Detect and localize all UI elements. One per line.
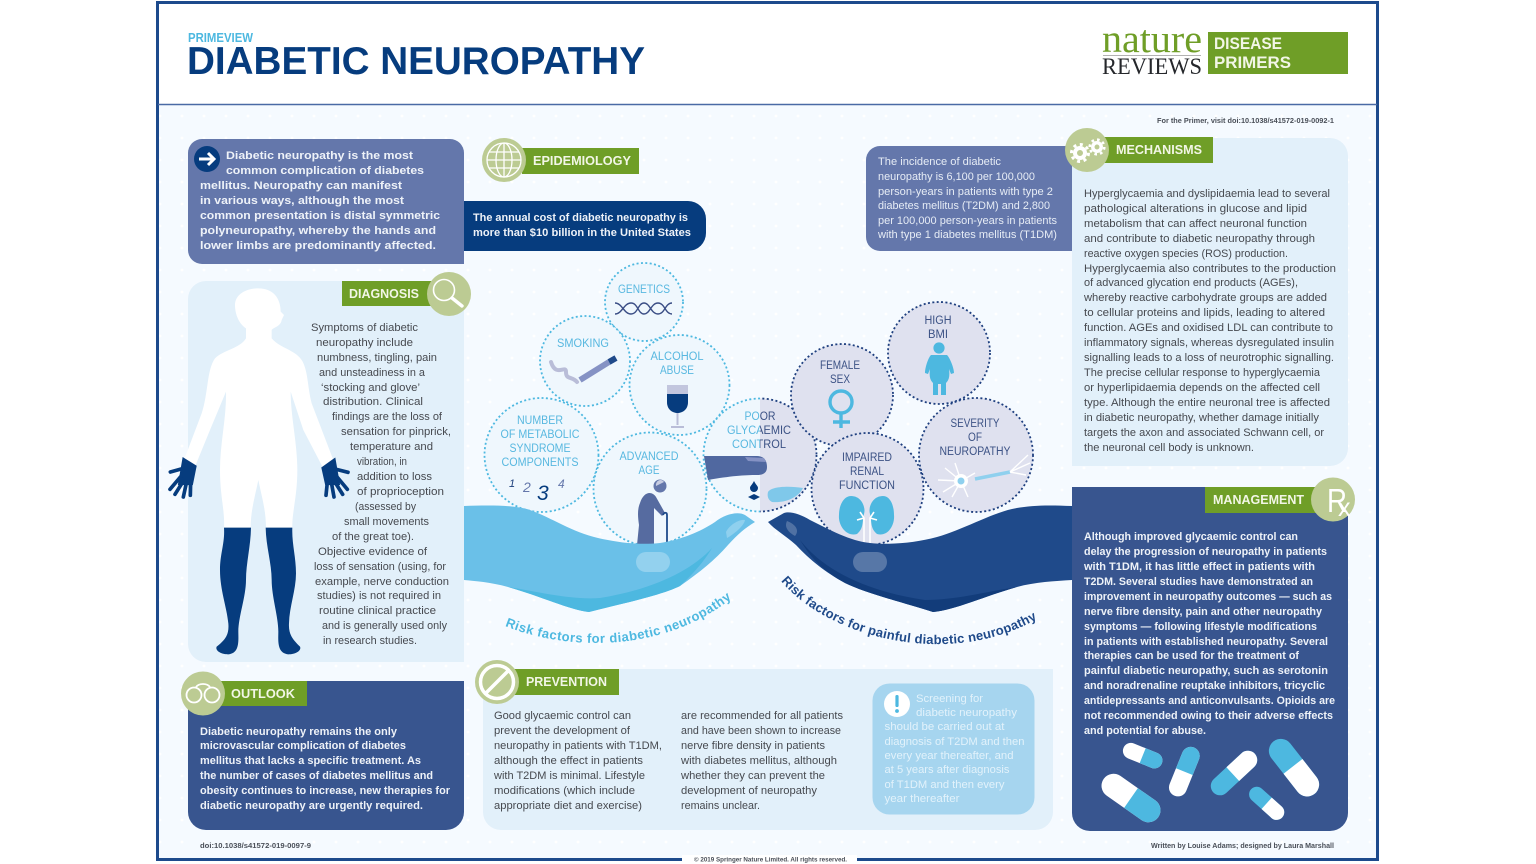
logo: nature reviews disease primers: PRIMERS bbox=[1214, 54, 1291, 72]
panel: annual cost bbox=[464, 201, 706, 251]
circle: advanced age: ADVANCED bbox=[620, 449, 679, 463]
circle: metabolic syndrome: COMPONENTS bbox=[502, 455, 578, 469]
circle: metabolic syndrome: NUMBER bbox=[517, 413, 563, 427]
panel: incidence: person-years in patients with type 2 bbox=[878, 186, 1053, 198]
heading: prevention: PREVENTION bbox=[526, 674, 607, 689]
prevention text column 1: Good glycaemic control can bbox=[494, 710, 631, 722]
logo: nature reviews disease primers: DISEASE bbox=[1214, 35, 1282, 53]
mechanisms text: type. Although the entire neuronal tree is affected bbox=[1084, 397, 1330, 409]
heading: management: x bbox=[1338, 494, 1351, 522]
management text: therapies can be used for the treatment of bbox=[1084, 650, 1299, 662]
mechanisms text: signalling leads to a loss of neurotrophic signalling. bbox=[1084, 352, 1334, 364]
callout: screening bbox=[872, 684, 1034, 814]
eyebrow: primeview: PRIMEVIEW bbox=[188, 31, 253, 45]
heading: diagnosis bbox=[342, 272, 471, 316]
circle: advanced age bbox=[594, 432, 706, 546]
heading: management: MANAGEMENT bbox=[1213, 492, 1304, 507]
caption: risk factors for painful diabetic neuropathy: Risk factors for painful diabetic neuropathy bbox=[782, 576, 1035, 644]
circle: poor glycaemic control: GLYCAEMIC bbox=[727, 423, 791, 437]
circle: metabolic syndrome: 3 bbox=[537, 482, 549, 505]
intro text: mellitus. Neuropathy can manifest bbox=[200, 180, 402, 192]
callout: screening: of T1DM and then every bbox=[884, 779, 1005, 791]
circle: female sex bbox=[791, 344, 893, 446]
title block bbox=[187, 31, 645, 83]
circle: severity of neuropathy: NEUROPATHY bbox=[940, 444, 1010, 458]
panel: incidence: neuropathy is 6,100 per 100,000 bbox=[878, 171, 1035, 183]
diagnosis text: of proprioception bbox=[357, 486, 444, 498]
outlook text: obesity continues to increase, new therapies for bbox=[200, 785, 451, 797]
circle: impaired renal function: IMPAIRED bbox=[842, 450, 892, 464]
callout: screening: Screening for bbox=[916, 693, 983, 705]
circle: smoking bbox=[540, 316, 630, 406]
circle: female sex: FEMALE bbox=[820, 358, 860, 372]
panel: incidence: per 100,000 person-years in patients bbox=[878, 215, 1057, 227]
mechanisms text: function. AGEs and oxidised LDL can contribute to bbox=[1084, 322, 1333, 334]
circle: genetics: GENETICS bbox=[618, 282, 670, 296]
diagnosis text: studies) is not required in bbox=[317, 590, 441, 602]
callout: screening: at 5 years after diagnosis bbox=[884, 764, 1010, 776]
prevention text column 1: although the effect in patients bbox=[494, 755, 643, 767]
mechanisms text: metabolism that can affect neuronal function bbox=[1084, 218, 1307, 230]
outlook text: microvascular complication of diabetes bbox=[200, 740, 406, 752]
diagnosis text: numbness, tingling, pain bbox=[317, 352, 437, 364]
panel: prevention bbox=[475, 660, 1053, 830]
diagnosis text: addition to loss bbox=[357, 471, 432, 483]
footer: doi: doi:10.1038/s41572-019-0097-9 bbox=[200, 841, 311, 850]
mechanisms text: whereby reactive carbohydrate groups are added bbox=[1083, 292, 1327, 304]
diagnosis text: in research studies. bbox=[323, 635, 417, 647]
callout: screening: year thereafter bbox=[884, 793, 960, 805]
heading: outlook bbox=[181, 672, 307, 716]
panel: annual cost: more than $10 billion in the United States bbox=[473, 227, 691, 239]
circle: poor glycaemic control bbox=[704, 398, 816, 512]
icon: arrow bbox=[194, 146, 220, 172]
intro text bbox=[200, 150, 440, 252]
mechanisms text: pathological alterations in glucose and lipid bbox=[1084, 203, 1307, 215]
footer: copyright: © 2019 Springer Nature Limited. All rights reserved. bbox=[694, 856, 847, 864]
risk factor circles: diabetic neuropathy bbox=[484, 263, 730, 546]
circle: metabolic syndrome: SYNDROME bbox=[510, 441, 570, 455]
outlook text: mellitus that lacks a specific treatment. As bbox=[200, 755, 421, 767]
heading: diagnosis: DIAGNOSIS bbox=[349, 286, 419, 301]
management text bbox=[1083, 531, 1335, 737]
panel: introduction bbox=[188, 139, 464, 264]
mechanisms text: Hyperglycaemia and dyslipidaemia lead to several bbox=[1084, 188, 1330, 200]
management text: Although improved glycaemic control can bbox=[1084, 531, 1298, 543]
page body background bbox=[158, 104, 1378, 859]
logo: nature reviews disease primers bbox=[1102, 18, 1348, 79]
logo: nature reviews disease primers: nature bbox=[1102, 18, 1202, 61]
prevention text column 1: appropriate diet and exercise) bbox=[494, 800, 642, 812]
management text: delay the progression of neuropathy in patients bbox=[1084, 546, 1327, 558]
outlook text: Diabetic neuropathy remains the only bbox=[200, 726, 398, 738]
panel: mechanisms bbox=[1065, 128, 1348, 466]
intro text: in various ways, although the most bbox=[200, 195, 404, 207]
circle: female sex: SEX bbox=[830, 372, 850, 386]
circle: high BMI: HIGH bbox=[924, 313, 952, 327]
prevention text column 2: and have been shown to increase bbox=[681, 725, 841, 737]
circle: poor glycaemic control: POOR bbox=[744, 409, 776, 423]
mechanisms text: targets the axon and associated Schwann cell, or bbox=[1084, 427, 1324, 439]
circle: severity of neuropathy: SEVERITY bbox=[950, 416, 1000, 430]
circle: poor glycaemic control: CONTROL bbox=[732, 437, 786, 451]
outlook text: diabetic neuropathy are urgently required. bbox=[200, 800, 423, 812]
heading: epidemiology: EPIDEMIOLOGY bbox=[533, 153, 631, 168]
heading: mechanisms bbox=[1065, 128, 1213, 172]
management text: painful diabetic neuropathy, such as serotonin bbox=[1084, 665, 1328, 677]
callout: screening: should be carried out at bbox=[884, 721, 1005, 733]
diagnosis text: and unsteadiness in a bbox=[319, 367, 426, 379]
management text: not recommended owing to their adverse effects bbox=[1084, 710, 1333, 722]
prevention text column 1 bbox=[493, 710, 662, 812]
circle: metabolic syndrome: 2 bbox=[522, 479, 531, 495]
diagnosis text: loss of sensation (using, for bbox=[314, 561, 446, 573]
circle: impaired renal function: RENAL bbox=[850, 464, 884, 478]
circle: metabolic syndrome: OF METABOLIC bbox=[500, 427, 580, 441]
prevention text column 2: with diabetes mellitus, although bbox=[680, 755, 837, 767]
risk factor circles: painful diabetic neuropathy bbox=[791, 302, 1033, 545]
white silhouette bbox=[184, 288, 333, 528]
diagnosis text: neuropathy include bbox=[316, 337, 413, 349]
management text: antidepressants and anticonvulsants. Opioids are bbox=[1084, 695, 1335, 707]
diagnosis text: of the great toe). bbox=[332, 531, 414, 543]
panel: incidence: The incidence of diabetic bbox=[878, 156, 1001, 168]
mechanisms text: inflammatory signals, whereas dysregulated insulin bbox=[1084, 337, 1334, 349]
intro text: Diabetic neuropathy is the most bbox=[226, 150, 413, 162]
mechanisms text: or hyperlipidaemia depends on the affected cell bbox=[1084, 382, 1320, 394]
hand: left, light blue bbox=[464, 505, 755, 612]
circle: alcohol abuse: ABUSE bbox=[660, 363, 694, 377]
mechanisms text: to cellular proteins and lipids, leading to altered bbox=[1084, 307, 1325, 319]
diagnosis text: routine clinical practice bbox=[319, 605, 436, 617]
circle: metabolic syndrome bbox=[484, 398, 598, 512]
panel: management bbox=[1072, 478, 1355, 831]
circle: impaired renal function: FUNCTION bbox=[839, 478, 895, 492]
primer reference: For the Primer, visit doi:10.1038/s41572-019-0092-1 bbox=[1157, 116, 1334, 125]
diagnosis text: small movements bbox=[344, 516, 429, 528]
mechanisms text: Hyperglycaemia also contributes to the production bbox=[1084, 263, 1336, 275]
prevention text column 2: are recommended for all patients bbox=[681, 710, 843, 722]
diagnosis text: sensation for pinprick, bbox=[341, 426, 451, 438]
heading: prevention bbox=[475, 660, 619, 704]
footer: credits: Written by Louise Adams; designed by Laura Marshall bbox=[1151, 841, 1334, 850]
prevention text column 2 bbox=[680, 710, 843, 812]
circle: smoking: SMOKING bbox=[557, 336, 609, 350]
management text: improvement in neuropathy outcomes — such as bbox=[1084, 591, 1332, 603]
panel: incidence: diabetes mellitus (T2DM) and 2,800 bbox=[878, 200, 1050, 212]
stockings bbox=[216, 528, 300, 654]
heading: management: R bbox=[1327, 482, 1347, 519]
heading: outlook: OUTLOOK bbox=[231, 686, 296, 701]
callout: screening: diabetic neuropathy bbox=[916, 707, 1017, 719]
prevention text column 2: remains unclear. bbox=[681, 800, 760, 812]
outlook text bbox=[200, 726, 451, 812]
circle: metabolic syndrome: 1 bbox=[509, 478, 515, 490]
diagnosis text: (assessed by bbox=[355, 501, 416, 513]
prevention text column 1: prevent the development of bbox=[494, 725, 631, 737]
management text: with T1DM, it has little effect in patients with bbox=[1083, 561, 1315, 573]
logo: nature reviews disease primers: REVIEWS bbox=[1102, 54, 1202, 79]
management text: symptoms — following lifestyle modifications bbox=[1084, 621, 1317, 633]
diagnosis text: Objective evidence of bbox=[318, 546, 428, 558]
mechanisms text: of advanced glycation end products (AGEs), bbox=[1084, 277, 1298, 289]
circle: alcohol abuse bbox=[630, 335, 730, 435]
management text: and potential for abuse. bbox=[1084, 725, 1206, 737]
mechanisms text: and contribute to diabetic neuropathy through bbox=[1084, 233, 1315, 245]
circle: severity of neuropathy bbox=[919, 398, 1033, 512]
icon: exclamation bbox=[884, 691, 910, 717]
icon: pills bbox=[1097, 734, 1324, 827]
management text: T2DM. Several studies have demonstrated an bbox=[1084, 576, 1313, 588]
circle: impaired renal function bbox=[812, 433, 924, 545]
prevention text column 2: whether they can prevent the bbox=[680, 770, 825, 782]
diagnosis text: and is generally used only bbox=[322, 620, 447, 632]
diagnosis text: temperature and bbox=[350, 441, 433, 453]
diagnosis text: findings are the loss of bbox=[332, 411, 443, 423]
heading: epidemiology bbox=[482, 138, 639, 182]
body figure bbox=[170, 288, 348, 654]
panel: diagnosis bbox=[170, 272, 471, 662]
mechanisms text: the neuronal cell body is unknown. bbox=[1084, 442, 1254, 454]
prevention text column 2: development of neuropathy bbox=[681, 785, 817, 797]
circle: severity of neuropathy: OF bbox=[968, 430, 982, 444]
prevention text column 1: with T2DM is minimal. Lifestyle bbox=[493, 770, 645, 782]
prevention text column 2: nerve fibre density in patients bbox=[681, 740, 825, 752]
circle: high BMI: BMI bbox=[928, 327, 948, 341]
intro text: lower limbs are predominantly affected. bbox=[200, 240, 436, 252]
heading: mechanisms: MECHANISMS bbox=[1116, 142, 1202, 157]
circle: alcohol abuse: ALCOHOL bbox=[650, 349, 704, 363]
intro text: common complication of diabetes bbox=[226, 165, 424, 177]
heading: management bbox=[1205, 478, 1355, 522]
mechanisms text bbox=[1083, 188, 1336, 454]
mechanisms text: in diabetic neuropathy, whether damage initially bbox=[1084, 412, 1319, 424]
mechanisms text: reactive oxygen species (ROS) production. bbox=[1084, 248, 1288, 260]
prevention text column 1: neuropathy in patients with T1DM, bbox=[494, 740, 662, 752]
caption: risk factors for diabetic neuropathy: Risk factors for diabetic neuropathy bbox=[506, 592, 730, 643]
circle: genetics bbox=[605, 263, 683, 341]
gloves bbox=[170, 460, 348, 497]
management text: and noradrenaline reuptake inhibitors, tricyclic bbox=[1084, 680, 1325, 692]
panel: annual cost: The annual cost of diabetic neuropathy is bbox=[473, 212, 688, 224]
intro text: common presentation is distal symmetric bbox=[200, 210, 440, 222]
panel: incidence bbox=[866, 146, 1072, 251]
intro text: polyneuropathy, whereby the hands and bbox=[200, 225, 436, 237]
main title: DIABETIC NEUROPATHY bbox=[187, 40, 645, 83]
diagnosis text: vibration, in bbox=[357, 456, 407, 468]
panel: incidence: with type 1 diabetes mellitus (T1DM) bbox=[877, 229, 1057, 241]
callout: screening: every year thereafter, and bbox=[884, 750, 1014, 762]
diagnosis text: distribution. Clinical bbox=[323, 396, 423, 408]
management text: nerve fibre density, pain and other neuropathy bbox=[1084, 606, 1323, 618]
circle: high BMI bbox=[888, 302, 990, 404]
outlook text: the number of cases of diabetes mellitus and bbox=[200, 770, 433, 782]
diagnosis text: example, nerve conduction bbox=[315, 576, 449, 588]
circle: metabolic syndrome: 4 bbox=[558, 477, 565, 491]
prevention text column 1: modifications (which include bbox=[494, 785, 635, 797]
mechanisms text: The precise cellular response to hyperglycaemia bbox=[1084, 367, 1321, 379]
panel: outlook bbox=[181, 672, 464, 830]
diagnosis text: Symptoms of diabetic bbox=[311, 322, 418, 334]
callout: screening: diagnosis of T2DM and then bbox=[884, 736, 1024, 748]
management text: in patients with established neuropathy. Several bbox=[1084, 636, 1328, 648]
diagnosis text bbox=[311, 322, 451, 647]
circle: advanced age: AGE bbox=[638, 463, 660, 477]
hand: right, navy bbox=[768, 505, 1072, 612]
diagnosis text: ‘stocking and glove’ bbox=[321, 382, 420, 394]
